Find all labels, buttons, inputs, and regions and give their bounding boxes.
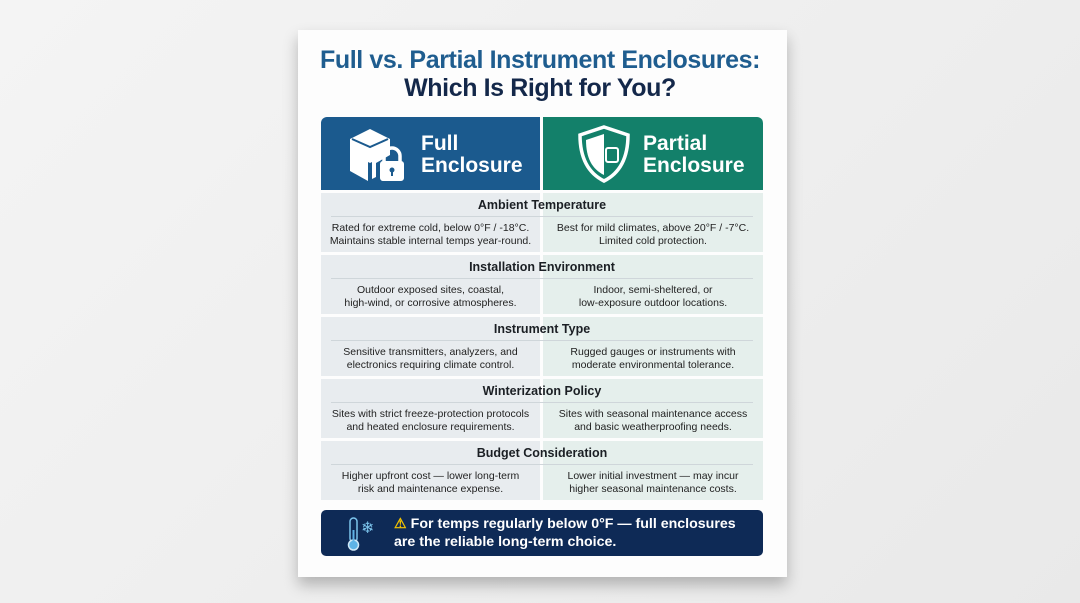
label: Enclosure	[643, 154, 745, 177]
header: partial enclosure	[543, 117, 763, 190]
row: installation environment: low-exposure outdoor locations.	[579, 297, 727, 309]
row: installation environment: Indoor, semi-sheltered, or	[593, 284, 713, 296]
icon: box with lock	[350, 129, 404, 181]
row: winterization policy: Sites with seasonal maintenance access	[559, 408, 747, 420]
row: installation environment	[321, 255, 763, 314]
row: instrument type: Rugged gauges or instruments with	[570, 346, 736, 358]
row: instrument type: Instrument Type	[494, 322, 590, 336]
row: winterization policy	[321, 379, 763, 438]
label: Enclosure	[421, 154, 523, 177]
row: budget consideration: higher seasonal maintenance costs.	[569, 483, 737, 495]
paper	[298, 30, 787, 577]
row: winterization policy: and basic weatherproofing needs.	[574, 421, 732, 433]
row: budget consideration: Lower initial investment — may incur	[568, 470, 738, 482]
row: budget consideration: Budget Consideration	[477, 446, 607, 460]
row: winterization policy: Winterization Policy	[483, 384, 601, 398]
row: installation environment: high-wind, or corrosive atmospheres.	[344, 297, 517, 309]
callout banner	[321, 510, 763, 556]
header: full enclosure	[321, 117, 540, 190]
label	[643, 132, 745, 177]
icon: thermometer and snowflake	[348, 517, 374, 551]
row: instrument type: electronics requiring climate control.	[347, 359, 514, 371]
row: ambient temperature: Ambient Temperature	[478, 198, 606, 212]
row: ambient temperature	[321, 193, 763, 252]
row: instrument type: Sensitive transmitters, analyzers, and	[343, 346, 518, 358]
row: ambient temperature: Maintains stable internal temps year-round.	[330, 235, 531, 247]
title: Full vs. Partial Instrument Enclosures:	[320, 46, 760, 74]
title: Which Is Right for You?	[404, 74, 676, 102]
label	[421, 132, 523, 177]
row: instrument type: moderate environmental tolerance.	[572, 359, 734, 371]
row: budget consideration: risk and maintenance expense.	[358, 483, 503, 495]
row: winterization policy: Sites with strict freeze-protection protocols	[332, 408, 529, 420]
row: budget consideration: Higher upfront cost — lower long-term	[342, 470, 519, 482]
row: winterization policy: and heated enclosure requirements.	[346, 421, 515, 433]
row: ambient temperature: Limited cold protection.	[599, 235, 707, 247]
icon: thermometer and snowflake: ❄	[361, 518, 374, 537]
label: Full	[421, 132, 458, 155]
row: instrument type	[321, 317, 763, 376]
row: budget consideration	[321, 441, 763, 500]
row: ambient temperature: Rated for extreme cold, below 0°F / -18°C.	[332, 222, 529, 234]
label: Partial	[643, 132, 707, 155]
row: installation environment: Outdoor exposed sites, coastal,	[357, 284, 504, 296]
callout text: are the reliable long-term choice.	[394, 534, 616, 550]
callout text: ⚠ For temps regularly below 0°F — full enclosures	[394, 516, 736, 532]
title	[320, 46, 760, 102]
row: installation environment: Installation Environment	[469, 260, 615, 274]
callout text	[394, 516, 736, 550]
row: ambient temperature: Best for mild climates, above 20°F / -7°C.	[557, 222, 749, 234]
icon: shield	[578, 125, 630, 183]
